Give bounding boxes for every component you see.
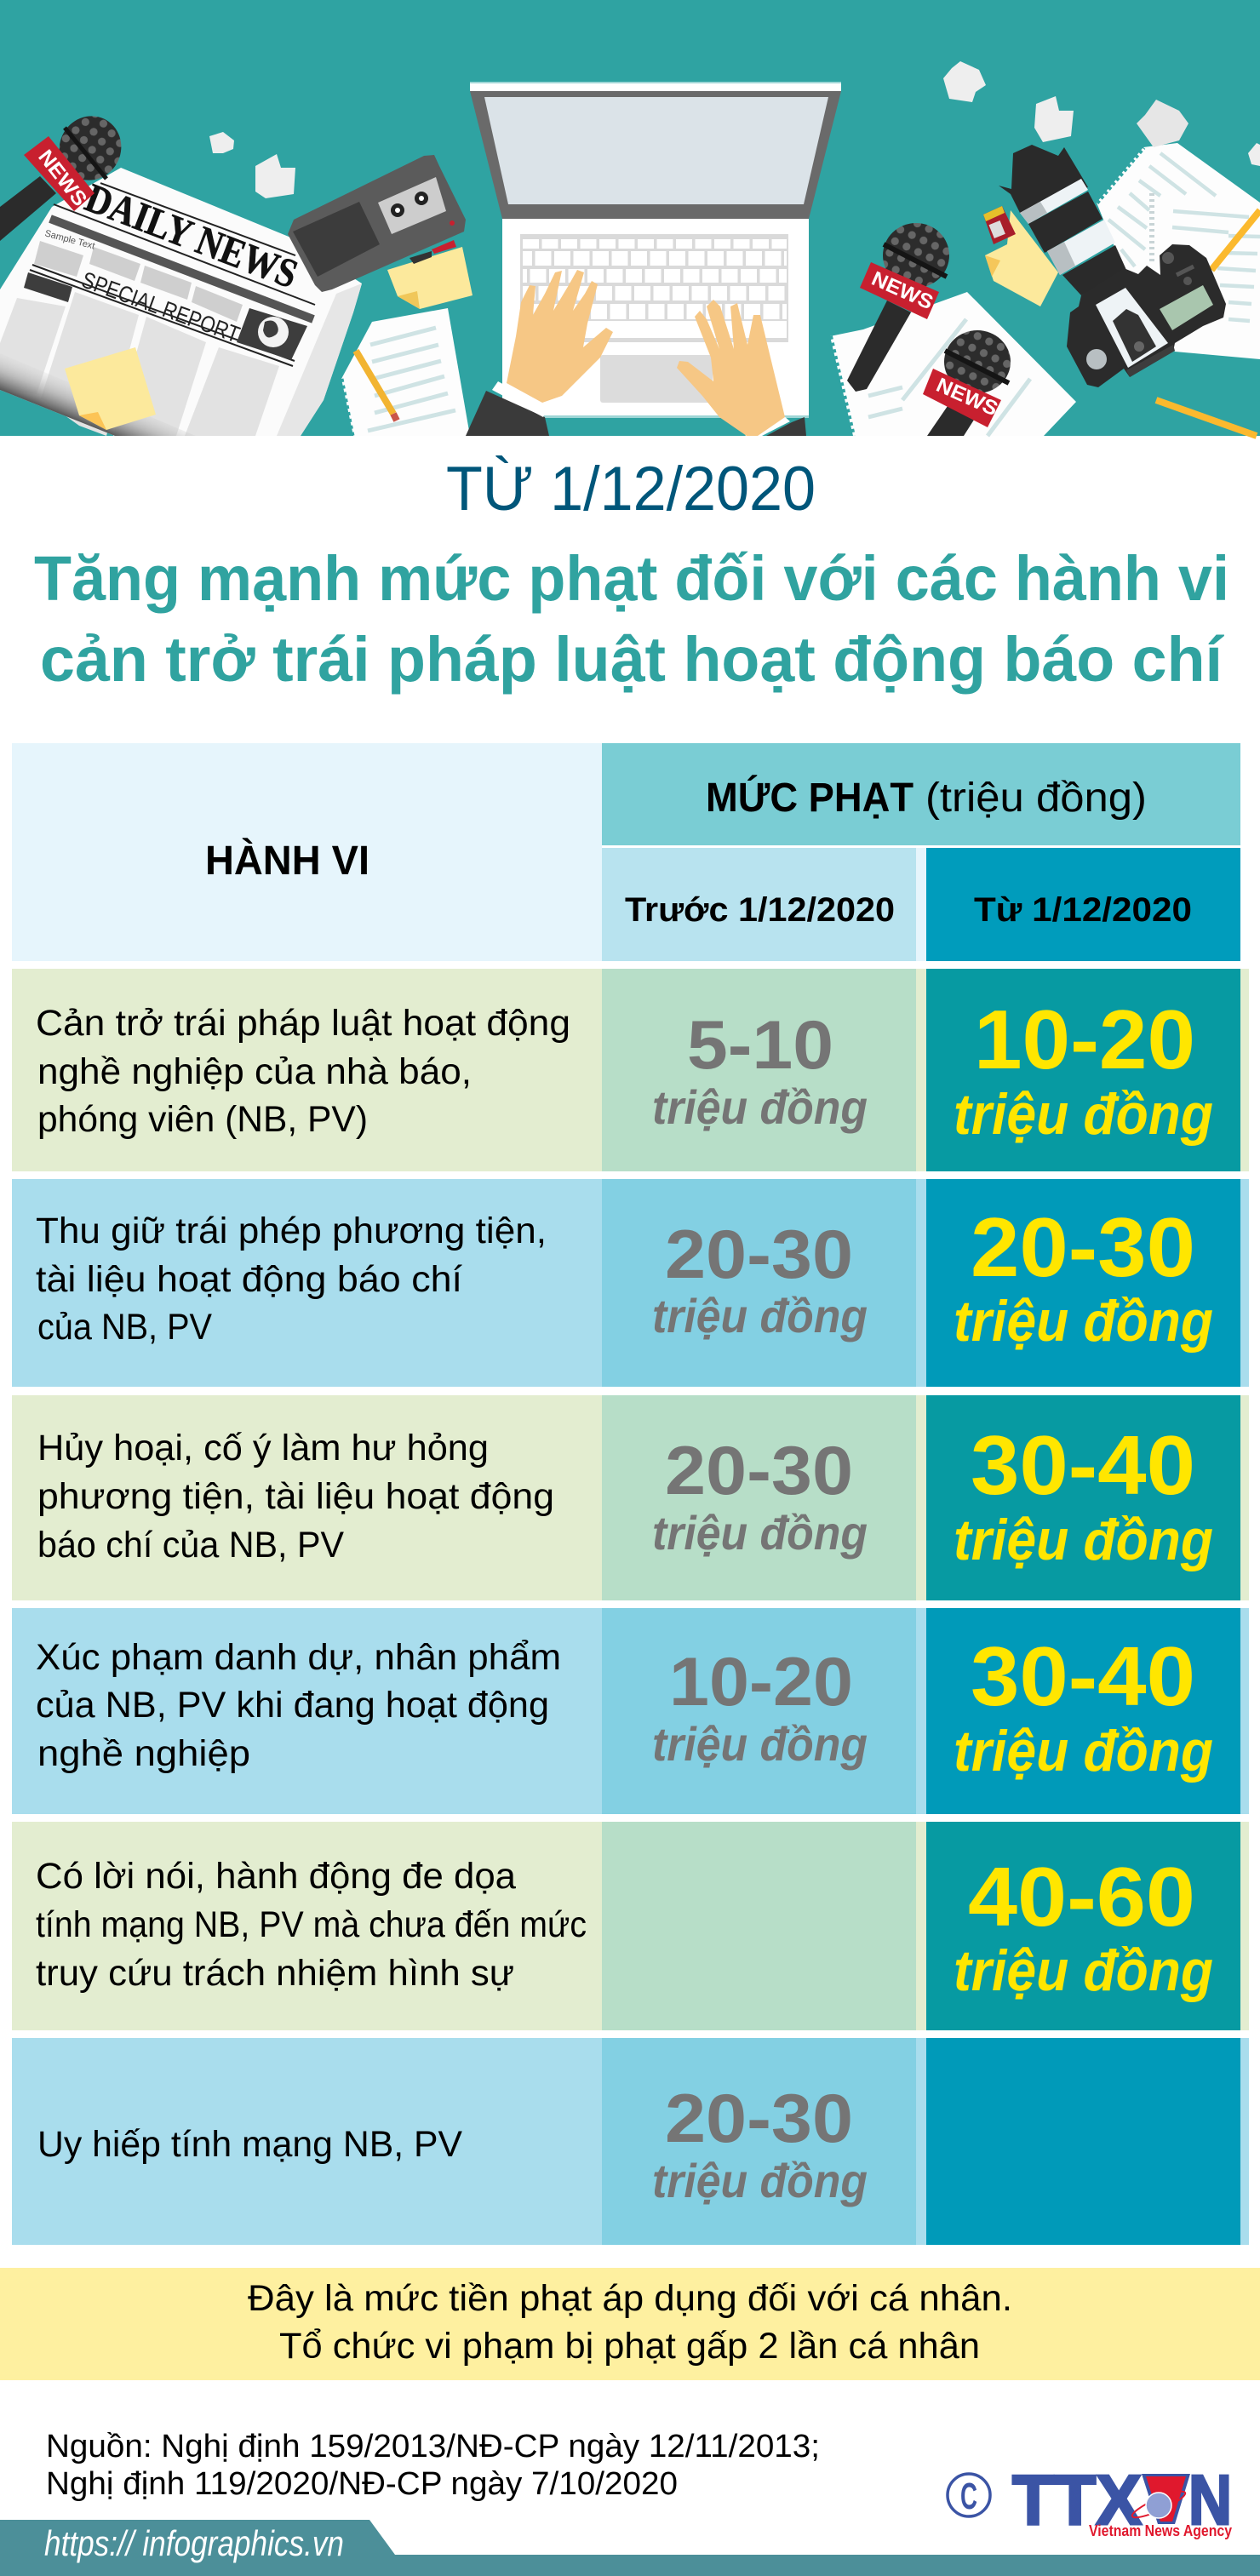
old fine — [652, 1644, 868, 1771]
new fine: 10-20 — [974, 993, 1195, 1086]
icon: microphone centre right — [847, 223, 949, 392]
behaviour text: nghề nghiệp của nhà báo, — [37, 1051, 472, 1092]
source text: Nguồn: Nghị định 159/2013/NĐ-CP ngày 12/11/2013; — [46, 2429, 820, 2464]
header illustration: newsroom desk — [0, 0, 1260, 436]
table header — [12, 743, 1240, 961]
icon: copyright: C — [960, 2476, 977, 2517]
icon: laptop — [470, 82, 841, 418]
behaviour text: phóng viên (NB, PV) — [37, 1099, 368, 1140]
behaviour text: báo chí của NB, PV — [37, 1525, 344, 1566]
new fine: triệu đồng — [954, 1082, 1213, 1147]
behaviour text: tính mạng NB, PV mà chưa đến mức — [36, 1904, 587, 1945]
newspaper masthead: DAILY NEWS — [79, 175, 304, 297]
main title — [34, 543, 1229, 695]
behaviour text: của NB, PV — [37, 1307, 212, 1348]
icon: copyright — [948, 2474, 990, 2517]
column heading: fine level: MỨC PHẠT — [706, 774, 914, 821]
new fine — [954, 1200, 1213, 1354]
old fine: 20-30 — [665, 1216, 853, 1293]
old fine — [652, 1007, 868, 1134]
logo: TTXVN — [1012, 2460, 1232, 2539]
new fine — [954, 1418, 1213, 1572]
new fine — [954, 993, 1213, 1147]
new fine: triệu đồng — [954, 1719, 1213, 1783]
old fine: 20-30 — [665, 2081, 853, 2157]
microphone flag text: NEWS — [868, 267, 936, 314]
old fine: triệu đồng — [652, 1717, 868, 1771]
behaviour text: Hủy hoại, cố ý làm hư hỏng — [37, 1428, 489, 1468]
new fine: 30-40 — [971, 1629, 1195, 1723]
old fine: triệu đồng — [652, 2154, 868, 2207]
old fine — [652, 1433, 868, 1560]
new fine — [954, 1850, 1213, 2003]
behaviour text: Uy hiếp tính mạng NB, PV — [37, 2124, 462, 2165]
new fine: triệu đồng — [954, 1508, 1213, 1572]
old fine: 10-20 — [669, 1644, 853, 1720]
row 5 — [12, 1822, 1249, 2030]
newspaper subheading: SPECIAL REPORT — [78, 266, 243, 347]
logo: TTXVN: TTX — [1012, 2460, 1142, 2539]
new fine: triệu đồng — [954, 1938, 1213, 2003]
logo globe — [1130, 2487, 1188, 2522]
row 4 — [12, 1608, 1249, 1814]
source text: Nghị định 119/2020/NĐ-CP ngày 7/10/2020 — [46, 2466, 678, 2502]
icon: photo camera — [999, 145, 1226, 387]
icon: left hand typing — [466, 270, 613, 436]
old fine: triệu đồng — [652, 1506, 868, 1560]
old fine: triệu đồng — [652, 1080, 868, 1134]
old fine: triệu đồng — [652, 1289, 868, 1342]
logo: TTXVN: N — [1188, 2460, 1232, 2539]
old fine: 20-30 — [665, 1433, 853, 1509]
behaviour text — [36, 1211, 547, 1348]
old fine — [652, 2081, 868, 2207]
behaviour text: Thu giữ trái phép phương tiện, — [36, 1211, 547, 1251]
behaviour text: Có lời nói, hành động đe dọa — [36, 1856, 516, 1897]
old fine: 5-10 — [687, 1007, 833, 1084]
icon: pencils right — [1156, 210, 1260, 436]
website url: https:// infographics.vn — [44, 2523, 344, 2563]
new fine: 40-60 — [968, 1850, 1195, 1943]
newspaper small caption: Sample Text — [43, 228, 96, 252]
callout: note on organisations — [0, 2268, 1260, 2380]
source text — [46, 2429, 820, 2502]
main title: cản trở trái pháp luật hoạt động báo chí — [40, 624, 1224, 695]
behaviour text — [36, 1003, 570, 1140]
behaviour text — [36, 1637, 561, 1774]
behaviour text: của NB, PV khi đang hoạt động — [36, 1685, 549, 1726]
microphone flag text: NEWS — [933, 374, 1001, 421]
icon: notepad and pencil left — [341, 308, 470, 436]
icon: yellow note with memory card — [983, 206, 1058, 306]
main title: Tăng mạnh mức phạt đối với các hành vi — [34, 543, 1229, 614]
date heading: TỪ 1/12/2020 — [446, 455, 816, 524]
behaviour text: Cản trở trái pháp luật hoạt động — [36, 1003, 570, 1044]
row 6 — [12, 2038, 1249, 2245]
icon: right hand typing — [677, 300, 806, 436]
column heading: fine level: (triệu đồng) — [925, 776, 1147, 821]
behaviour text — [37, 1428, 554, 1566]
logo tagline: Vietnam News Agency — [1089, 2522, 1232, 2539]
behaviour text: tài liệu hoạt động báo chí — [36, 1259, 462, 1300]
column heading: before date: Trước 1/12/2020 — [625, 891, 895, 929]
footer band — [0, 2520, 1260, 2576]
old fine — [652, 1216, 868, 1342]
behaviour text: Xúc phạm danh dự, nhân phẩm — [36, 1637, 561, 1678]
row 3 — [12, 1395, 1249, 1600]
behaviour text — [36, 1856, 587, 1994]
microphone flag text: NEWS — [33, 146, 91, 211]
icon: sticky note and cassette recorder — [288, 155, 472, 309]
behaviour text: phương tiện, tài liệu hoạt động — [37, 1476, 554, 1517]
row 1 — [12, 969, 1249, 1171]
new fine: 20-30 — [971, 1200, 1195, 1294]
new fine: 30-40 — [971, 1418, 1195, 1512]
icon: crumpled paper balls — [209, 61, 1260, 198]
new fine — [954, 1629, 1213, 1783]
column heading: behaviour: HÀNH VI — [205, 838, 369, 884]
icon: notes behind camera — [1097, 143, 1260, 359]
icon: newspaper Daily News — [0, 168, 362, 436]
callout: note on organisations: Tổ chức vi phạm bị phạt gấp 2 lần cá nhân — [279, 2326, 980, 2367]
behaviour text: nghề nghiệp — [37, 1733, 250, 1774]
behaviour text: truy cứu trách nhiệm hình sự — [36, 1953, 514, 1994]
row 2 — [12, 1179, 1249, 1387]
column heading: from date: Từ 1/12/2020 — [974, 891, 1192, 929]
new fine: triệu đồng — [954, 1289, 1213, 1354]
icon: paper under microphones — [830, 292, 1076, 436]
icon: microphone bottom right — [923, 330, 1011, 436]
icon: crumpled paper on notes — [1137, 100, 1188, 147]
icon: microphone left — [0, 106, 132, 241]
callout: note on organisations: Đây là mức tiền phạt áp dụng đối với cá nhân. — [248, 2278, 1012, 2319]
